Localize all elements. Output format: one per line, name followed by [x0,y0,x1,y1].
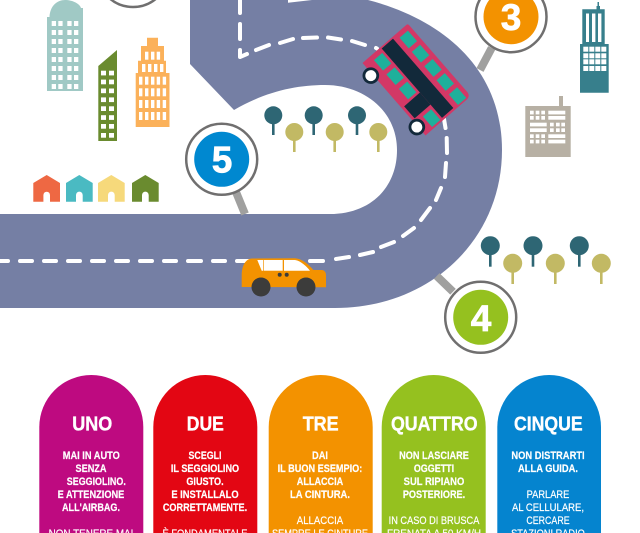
panel: quattro: IN CASO DI BRUSCA [389,515,480,527]
panel: uno [39,375,143,533]
panel: due: IL SEGGIOLINO [171,463,240,475]
panel: uno: MAI IN AUTO [63,450,120,462]
trees right of road [481,236,611,284]
panel: tre: ALLACCIA [297,476,343,488]
building: orange stepped tower [136,38,170,127]
bus [355,24,471,142]
panel: due: DUE [187,414,224,436]
building: grey office block [525,96,571,157]
panel: due: CORRETTAMENTE. [163,502,247,514]
marker: number 5 [186,124,257,214]
panel: tre: TRE [303,414,339,436]
marker: number 3 [476,0,546,70]
building: light teal dome tower [47,0,83,91]
panel: cinque: CERCARE [526,515,570,527]
panel: tre: LA CINTURA. [290,489,350,501]
panel: cinque: CINQUE [514,414,583,436]
marker: number 5: 5 [212,140,232,180]
panel: quattro: POSTERIORE. [403,489,465,501]
marker: number 4 [437,276,516,353]
panel: cinque: AL CELLULARE, [512,502,584,514]
panel: cinque [497,375,601,533]
panel: tre: IL BUON ESEMPIO: [278,463,362,475]
marker: partial top pin [97,0,169,7]
panel: quattro: SUL RIPIANO [404,476,465,488]
panel: quattro: NON LASCIARE [399,450,469,462]
panel: due: E INSTALLALO [171,489,239,501]
houses [33,175,159,202]
panel: uno: ALL'AIRBAG. [62,502,120,514]
panel: uno: SEGGIOLINO. [67,476,126,488]
panel: due: SCEGLI [188,450,222,462]
panel: uno: UNO [72,414,112,436]
panel: tre [269,375,373,533]
panel: quattro: QUATTRO [391,414,478,436]
panel: quattro [382,375,486,533]
car [242,258,326,296]
panel: due: GIUSTO. [186,476,224,488]
marker: number 4: 4 [471,298,492,339]
building: dark teal skyscraper [580,2,609,93]
building: green slanted tower [98,50,117,141]
trees inside road curve [264,106,387,152]
road [0,0,502,308]
panel: due [153,375,257,533]
panel: tre: DAI [312,450,328,462]
panel: cinque: NON DISTRARTI [511,450,585,462]
panel: uno: SENZA [76,463,107,475]
panel: tre: ALLACCIA [297,515,344,527]
panel: uno: E ATTENZIONE [58,489,124,501]
panel: cinque: ALLA GUIDA. [518,463,578,475]
panel: quattro: OGGETTI [414,463,454,475]
panel: cinque: PARLARE [527,489,569,501]
